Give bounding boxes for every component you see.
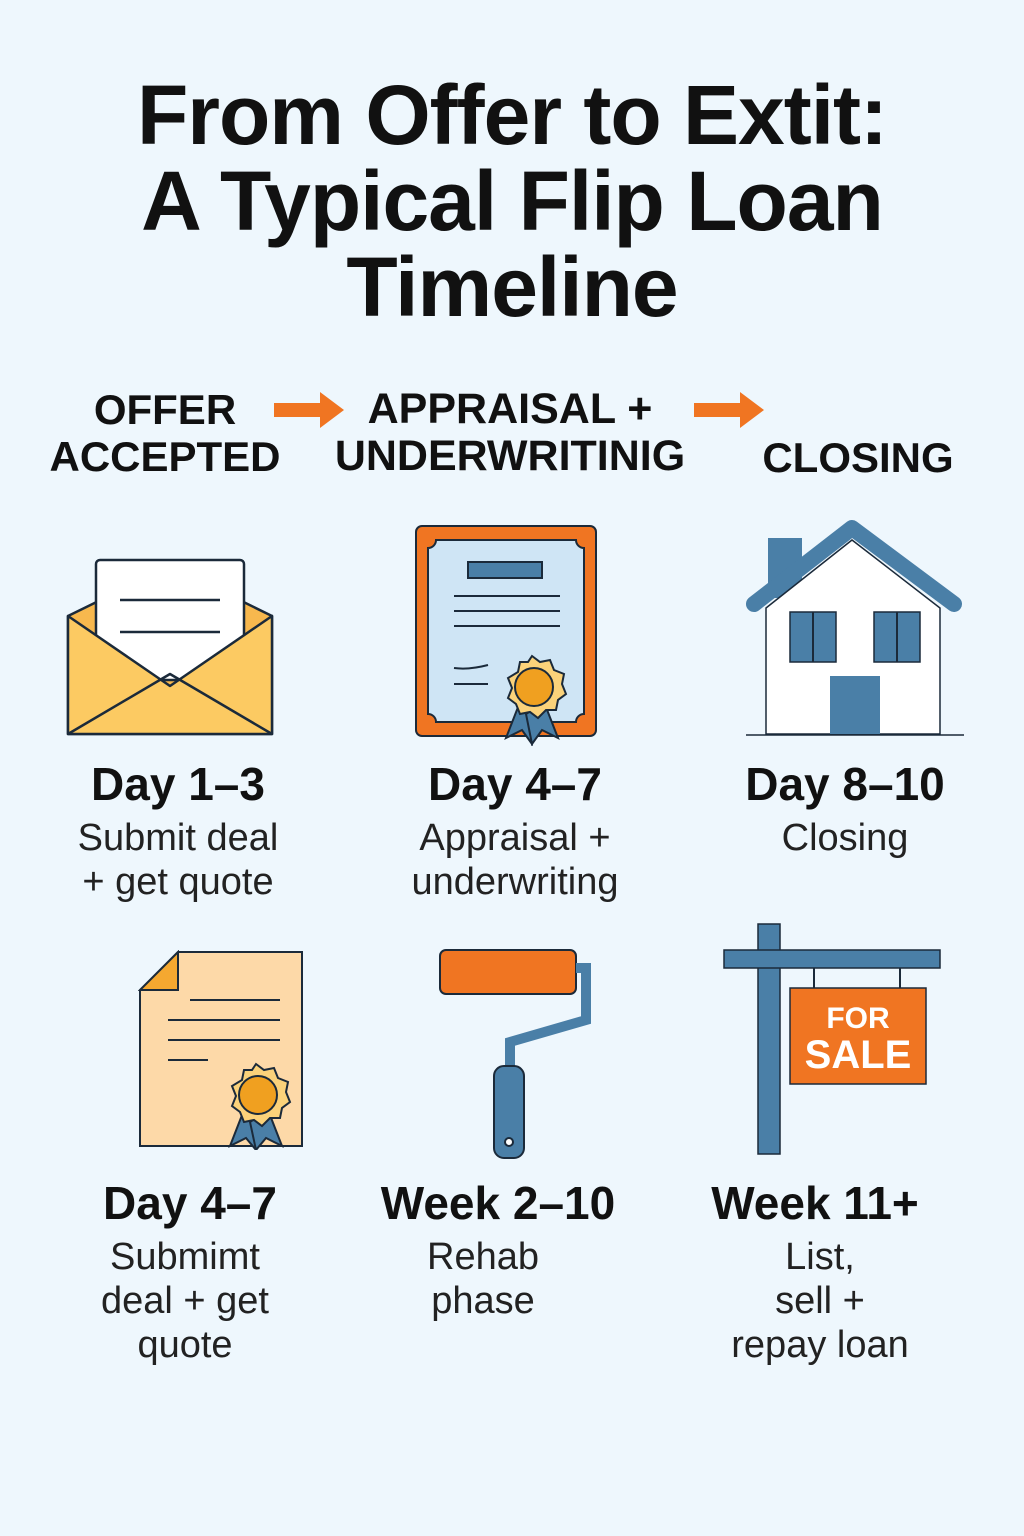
label: day 4-7: Appraisal + — [419, 817, 611, 859]
icon: certificate — [415, 525, 597, 746]
label: day 4-7: underwriting — [412, 861, 618, 903]
header: closing: CLOSING — [762, 434, 954, 481]
label: week 11+: List, — [785, 1236, 855, 1278]
header: appraisal + underwriting — [335, 385, 685, 480]
label: week 2-10: phase — [431, 1280, 535, 1322]
icon: for sale sign — [723, 923, 941, 1155]
label: day 4-7 — [412, 758, 618, 903]
label: day 8-10: Closing — [782, 817, 908, 859]
label: day 4-7 submit: Submimt — [110, 1236, 260, 1278]
label: day 8-10: Day 8–10 — [745, 758, 945, 810]
header: offer accepted — [49, 386, 281, 480]
header: appraisal + underwriting: UNDERWRITINIG — [335, 432, 685, 480]
icon: house — [746, 520, 964, 736]
icon: document with seal — [138, 950, 303, 1150]
label: week 11+: Week 11+ — [711, 1177, 919, 1229]
arrow 1 — [274, 392, 344, 428]
title: Timeline — [346, 240, 678, 334]
icon: for sale sign: FOR — [826, 1002, 890, 1035]
label: week 2-10: Week 2–10 — [381, 1177, 615, 1229]
label: day 4-7 submit: Day 4–7 — [103, 1177, 277, 1229]
header: offer accepted: ACCEPTED — [49, 433, 281, 480]
label: day 1-3: + get quote — [82, 861, 274, 903]
label: week 2-10 — [380, 1177, 615, 1322]
title: A Typical Flip Loan — [141, 154, 883, 248]
header: appraisal + underwriting: APPRAISAL + — [368, 385, 652, 433]
arrow 2 — [694, 392, 764, 428]
label: day 4-7: Day 4–7 — [428, 758, 602, 810]
label: day 4-7 submit: quote — [137, 1324, 233, 1366]
title: From Offer to Extit: — [137, 68, 887, 162]
label: day 1-3 — [78, 758, 278, 903]
label: week 11+: sell + — [775, 1280, 865, 1322]
label: week 2-10: Rehab — [427, 1236, 539, 1278]
label: week 11+: repay loan — [731, 1324, 909, 1366]
label: day 4-7 submit: deal + get — [101, 1280, 269, 1322]
label: day 1-3: Submit deal — [78, 817, 278, 859]
label: day 4-7 submit — [101, 1177, 277, 1366]
title — [137, 68, 887, 334]
icon: for sale sign: SALE — [805, 1033, 911, 1077]
header: offer accepted: OFFER — [94, 386, 236, 433]
label: week 11+ — [711, 1177, 919, 1366]
label: day 8-10 — [745, 758, 945, 859]
icon: envelope — [66, 558, 274, 736]
icon: paint roller — [439, 949, 591, 1159]
label: day 1-3: Day 1–3 — [91, 758, 265, 810]
